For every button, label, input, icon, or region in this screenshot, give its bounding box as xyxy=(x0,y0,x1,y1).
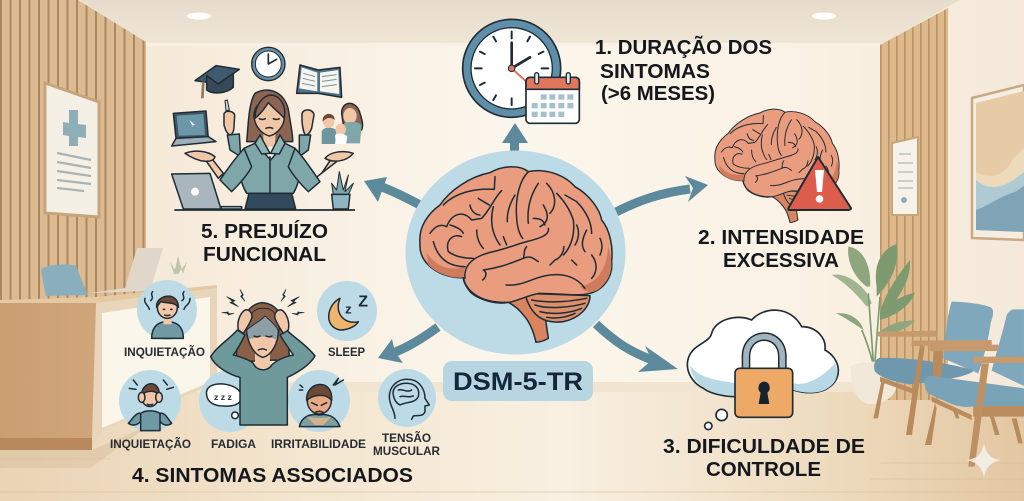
icon: woman with headache xyxy=(211,289,315,425)
heading 2: 2. INTENSIDADE xyxy=(698,227,864,249)
symptom labels xyxy=(110,346,441,458)
arrow to item 4 xyxy=(378,327,438,363)
heading 5: FUNCIONAL xyxy=(203,244,326,266)
arrow to item 3 xyxy=(596,324,678,372)
heading 3 xyxy=(663,436,865,481)
heading 2 xyxy=(698,227,864,272)
icon: sleep thought cloud xyxy=(206,384,242,419)
right wood slat panel xyxy=(880,8,948,400)
panel 3: difficulty of control xyxy=(663,310,865,481)
waiting room chairs xyxy=(873,302,1024,467)
heading 1: (>6 MESES) xyxy=(601,83,715,105)
icon: boy covering head xyxy=(128,380,173,431)
central circle xyxy=(406,150,626,354)
panel 5: functional impairment xyxy=(172,47,363,266)
reception desk xyxy=(0,285,217,468)
symptom labels: MUSCULAR xyxy=(373,446,441,458)
arrow to item 5 xyxy=(364,177,420,205)
heading 5: 5. PREJUÍZO xyxy=(201,220,328,243)
watermark star xyxy=(966,443,1001,478)
central brain xyxy=(420,167,612,342)
icon: angry boy xyxy=(299,378,343,427)
heading 3: 3. DIFICULDADE DE xyxy=(663,436,865,458)
icon: head with brain xyxy=(389,379,429,419)
poster with medical cross xyxy=(45,83,99,217)
symptom labels: INQUIETAÇÃO xyxy=(124,346,205,359)
DSM-5-TR badge: DSM-5-TR xyxy=(453,368,583,396)
icon: brain with warning xyxy=(715,109,851,223)
reception laptop and plant xyxy=(90,248,188,293)
heading 3: CONTROLE xyxy=(706,459,821,481)
icon: restless boy xyxy=(145,292,190,338)
symptom labels: SLEEP xyxy=(328,347,365,359)
panel 1: symptom duration xyxy=(463,19,772,123)
panel 2: excessive intensity xyxy=(698,109,864,272)
heading 1: 1. DURAÇÃO DOS xyxy=(595,36,772,59)
framed certificate xyxy=(892,137,918,215)
icon: overwhelmed woman at desk xyxy=(172,47,363,210)
framed wall painting xyxy=(972,85,1024,240)
heading 4: 4. SINTOMAS ASSOCIADOS xyxy=(132,465,413,487)
DSM-5-TR badge xyxy=(443,361,593,401)
icon: clock and calendar xyxy=(463,19,579,123)
icon: sleep thought cloud: z z z xyxy=(214,392,232,402)
heading 5 xyxy=(201,220,328,266)
icon: moon and zz: Z xyxy=(358,294,368,311)
arrow to item 2 xyxy=(616,176,708,212)
panel 4: associated symptoms xyxy=(110,280,441,487)
potted plant xyxy=(832,244,915,404)
icon: moon and zz xyxy=(329,294,368,330)
icon: cloud with padlock xyxy=(687,310,838,430)
symptom circles xyxy=(119,280,436,432)
icon: moon and zz: z xyxy=(345,301,352,316)
symptom labels: INQUIETAÇÃO xyxy=(110,438,191,451)
symptom labels: IRRITABILIDADE xyxy=(271,439,366,451)
left wood slat wall xyxy=(0,0,146,300)
symptom labels: FADIGA xyxy=(211,439,256,451)
heading 1: SINTOMAS xyxy=(600,61,710,83)
arrow to item 1 xyxy=(502,123,528,166)
symptom labels: TENSÃO xyxy=(382,432,431,445)
reception chair xyxy=(41,264,88,296)
heading 2: EXCESSIVA xyxy=(723,250,839,272)
heading 1 xyxy=(595,36,772,105)
